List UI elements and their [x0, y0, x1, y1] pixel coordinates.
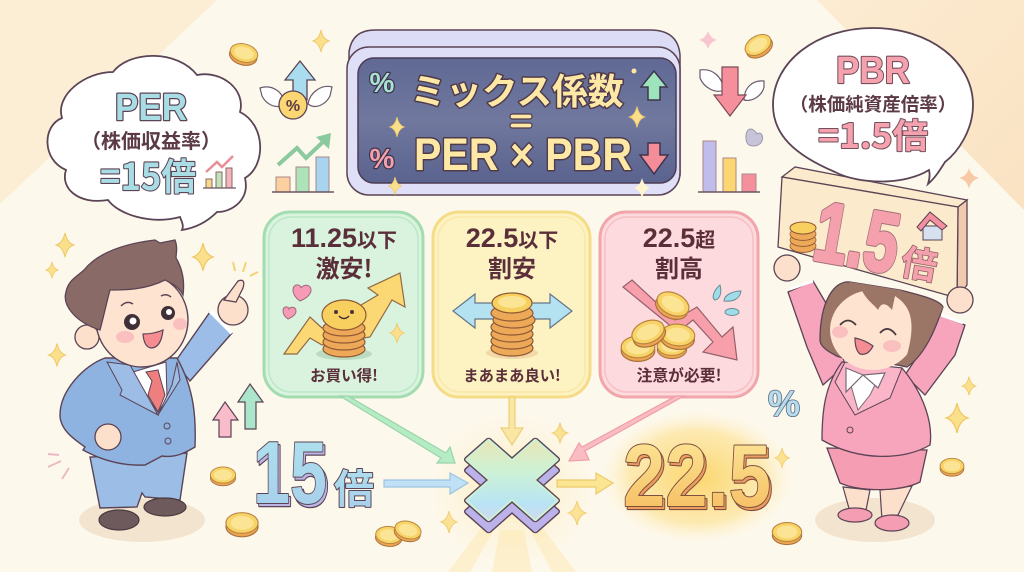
chart: falling bars: [698, 141, 760, 192]
icon: up arrow: [641, 71, 667, 100]
heading: ミックス係数: ミックス係数: [410, 63, 624, 115]
multiply symbol: [444, 420, 580, 551]
icon: mini bar chart: [203, 156, 236, 188]
icon: coin stack: [790, 222, 816, 252]
character: woman in pink suit: [788, 281, 965, 542]
title panel: [347, 30, 680, 198]
icon: grey heart: [746, 129, 763, 146]
background corner: top right: [817, 0, 1024, 210]
icon: percent green: %: [370, 67, 395, 98]
icon: house: [917, 212, 947, 240]
verdict: 激安!: [316, 249, 372, 284]
glow behind result: [601, 411, 793, 543]
caption: お買い得!: [310, 364, 378, 386]
value: 倍: 倍: [897, 233, 942, 291]
card: 11.25以下 激安: [264, 212, 423, 397]
heading: PBR: PBR: [836, 50, 910, 92]
value: 15倍: 倍: [334, 457, 374, 515]
icon: coins with rising arrow: [283, 273, 405, 360]
caption: まあまあ良い!: [463, 364, 561, 386]
icon: percent blue: %: [768, 383, 800, 424]
value: =15倍: =15倍: [100, 147, 196, 201]
threshold: 11.25以下: [291, 223, 397, 253]
threshold: 22.5超: [643, 223, 715, 253]
icon: winged percent with up arrow: [260, 61, 332, 119]
board: 1.5倍: [774, 167, 973, 313]
result: 22.5: 22.5: [625, 429, 773, 528]
rays below X: [448, 524, 576, 572]
background corner: top left: [0, 0, 217, 204]
icon: pink and green up arrows: [213, 384, 263, 437]
label: 株価収益率: （株価収益率）: [81, 125, 221, 154]
icon: percent pink: %: [370, 143, 395, 174]
icon: winged percent with up arrow: %: [286, 98, 300, 115]
speech bubble: PER: [47, 56, 260, 230]
threshold: 22.5以下: [466, 223, 558, 253]
label: 株価純資産倍率: （株価純資産倍率）: [790, 91, 956, 117]
equals sign: [510, 114, 532, 128]
value: 1.5: 1.5: [808, 184, 907, 291]
icon: coin stack with two-way arrow: [453, 293, 572, 359]
value: 1.5: 1.5: [808, 184, 907, 291]
formula: PER × PBR: PER × PBR: [414, 129, 632, 180]
icon: coins with falling arrow: [621, 280, 741, 361]
arrow: 15倍 to X: [384, 473, 468, 494]
icon: down arrow: [640, 143, 668, 174]
sparkles in panel: [389, 68, 650, 198]
value: 15倍: 15: [253, 423, 327, 522]
arrow: green from card to X: [340, 396, 455, 463]
arrow: X to result: [557, 473, 613, 494]
speech bubble: PBR: [773, 28, 973, 184]
arrow: pink from card to X: [569, 396, 684, 461]
chart: rising bars: [272, 133, 334, 192]
glow behind X: [427, 412, 597, 568]
caption: 注意が必要!: [637, 363, 721, 386]
icon: winged down arrow: [700, 67, 764, 116]
arrow: yellow from card to X: [501, 397, 523, 445]
hands holding board: [774, 255, 973, 313]
character: man in blue suit: [48, 240, 258, 542]
verdict: 割安: [488, 249, 536, 284]
heading: PER: PER: [115, 87, 187, 129]
card: 22.5超 割高: [600, 212, 758, 397]
value: =1.5倍: =1.5倍: [818, 109, 928, 158]
value: 15倍: 15: [255, 426, 329, 525]
card: 22.5以下 割安: [433, 212, 590, 397]
verdict: 割高: [655, 249, 703, 284]
result: 22.5: 22.5: [623, 426, 771, 525]
